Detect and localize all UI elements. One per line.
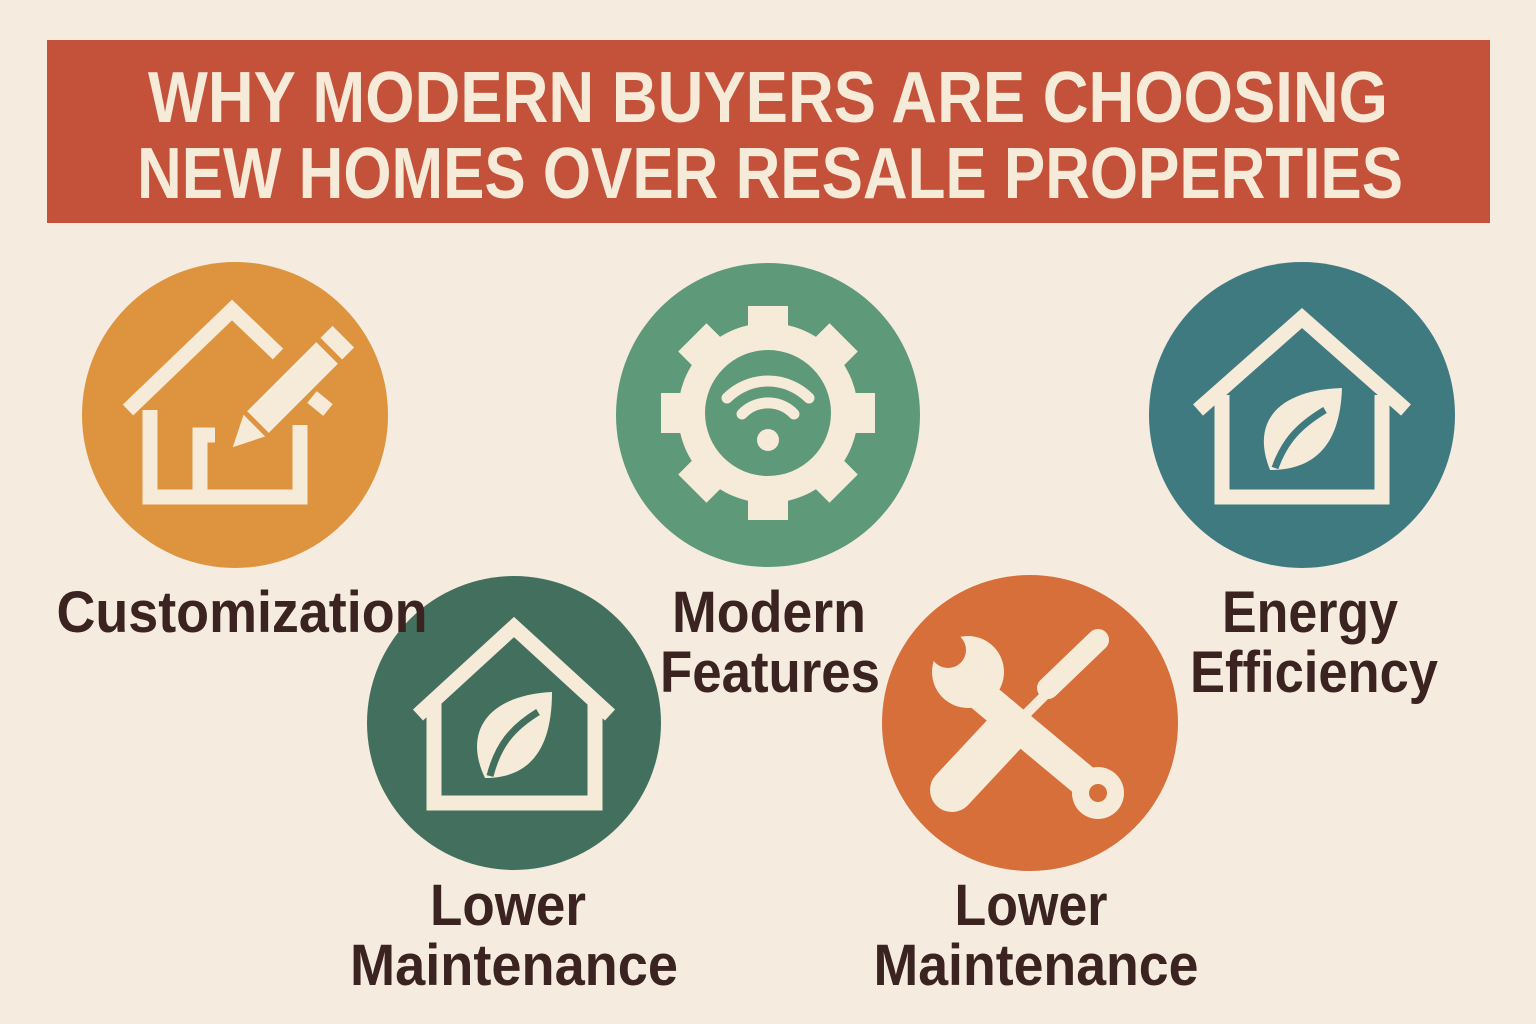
label: Modern Features: Modern — [672, 580, 866, 645]
label: Lower Maintenance (left): Lower — [430, 873, 586, 938]
title banner: WHY MODERN BUYERS ARE CHOOSING — [148, 58, 1388, 138]
label: Lower Maintenance (left) — [350, 873, 678, 998]
title banner — [47, 40, 1490, 223]
icon: modern features gear with wifi — [616, 263, 920, 567]
label: Modern Features — [660, 580, 880, 705]
label: Modern Features: Features — [660, 640, 880, 705]
icon: customization house with pencil — [82, 262, 388, 568]
label: Lower Maintenance (right): Lower — [954, 873, 1108, 938]
icon: lower maintenance house with leaf — [367, 576, 661, 870]
label: Energy Efficiency: Efficiency — [1190, 640, 1438, 705]
label: Lower Maintenance (right) — [874, 873, 1198, 998]
label: Lower Maintenance (right): Maintenance — [874, 933, 1198, 998]
icon: energy efficiency house with leaf — [1149, 262, 1455, 568]
label: Customization: Customization — [56, 580, 428, 645]
label: Energy Efficiency — [1190, 580, 1438, 705]
icon: wrench and screwdriver — [882, 575, 1178, 871]
label: Energy Efficiency: Energy — [1222, 580, 1398, 645]
label: Lower Maintenance (left): Maintenance — [350, 933, 678, 998]
